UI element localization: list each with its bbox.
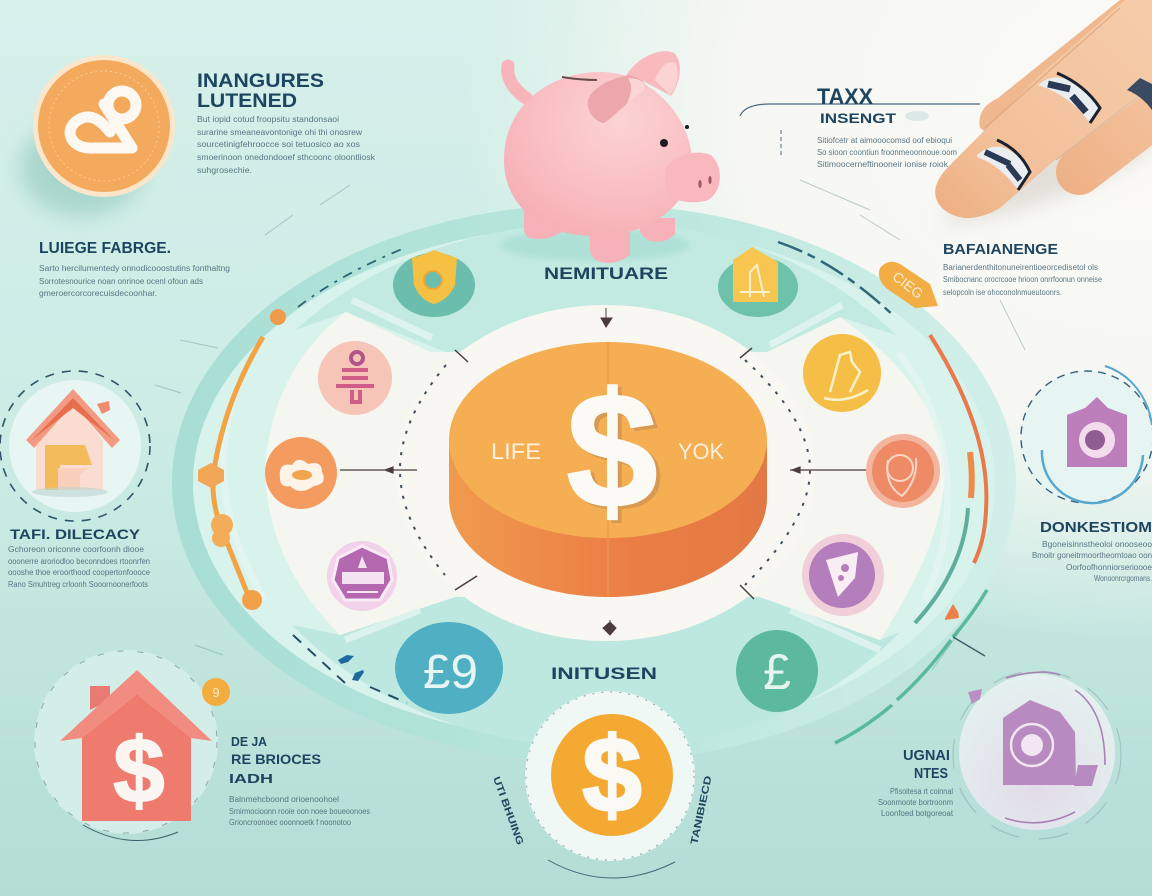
hand shadow [940,90,1152,222]
dollar sign: $ [566,359,658,542]
text block: right middle: Bgoneisinnstheoloi onooseoo [1042,540,1152,549]
outer mint band [172,204,1016,762]
icon: orange circle left [265,437,337,509]
pig far ear [626,51,680,96]
text block: bottom left: Balnmehcboond orioenoohoel [229,795,339,804]
icon: orange pill: CIEG [890,268,926,302]
pig snout [665,153,720,202]
pig shadow [500,229,690,261]
dollar sign shadow: $ [570,362,662,545]
icon: red house with dollar: $ [113,720,165,822]
icon: green circle [736,630,818,712]
icon: house right [1021,366,1152,503]
inner white dial [265,305,945,641]
text block: upper left [39,264,230,298]
pig tail [508,66,526,98]
heading: top left [197,71,324,112]
text block: left middle: Rano Smuhtreg crloonh Sooornoonerfoots [8,580,148,589]
dashed inner orbit right [745,360,810,585]
text block: upper left: gmeroercorcorecuisdecoonhar. [39,289,157,298]
orange and green right arcs [778,242,987,743]
text block: top left: smoerinoon onedondooef sthcoonc oloontliosk [197,153,376,162]
icon: purple badge left [327,541,397,611]
heading: upper right: BAFAIANENGE [943,241,1058,258]
heading: tax: TAXX [817,84,873,109]
text block: tax: Sitiofcetr at aimooocomsd oof ebioqui [817,136,952,145]
text block: upper right: selopcoln ise ohoconolnmueutoonrs. [943,288,1062,297]
icon: purple house bottom right [953,671,1121,839]
far finger [1079,95,1152,172]
hand with rings [935,0,1152,222]
pig eyes [660,125,689,147]
icon: blue circle [395,622,503,714]
heading: bottom right: UGNAI [903,747,950,764]
heading: top left: LUTENED [197,91,297,112]
text block: left middle [8,545,151,589]
pig body [504,72,692,236]
pig legs [524,205,675,263]
icon: pink circle [318,341,392,415]
text block: left middle: ooonerre aroriodloo beconndoes rtoonrfen [8,557,150,566]
icon: orange coin top left [20,55,175,216]
text block: bottom left: Grioncroonoec ooonnoetk f noonotoo [229,818,351,827]
heading: tax: INSENGT [820,110,897,126]
text block: bottom left [229,795,370,827]
icon: teal tag [718,247,798,317]
text block: bottom right: Pfisoitesa rt coinnal [890,787,953,796]
main finger [935,0,1152,218]
heading: bottom left [229,734,321,786]
icon: purple badge right [802,534,884,616]
top mint sector [296,222,896,352]
heading: tax [740,84,980,158]
dashed inner orbit left [400,365,446,575]
text block: upper left: Sorrotesnourice noan onrinoe ocenl ofoun ads [39,277,203,286]
heading: ring top: NEMITUARE [544,264,668,283]
icon: orange pill [879,262,938,308]
central coin [449,342,767,597]
finger ring 3 [1127,78,1152,110]
icon: small orange coin: 9 [212,685,220,700]
coin top [449,342,767,538]
text block: upper right: Smibocnanc orocrcooe hrioon onrrfoonun onneise [943,275,1102,284]
orange left arc with nodes [198,309,286,610]
coin slot [562,77,597,80]
text block: right middle: Bmoitr goneitrmoortheomtoao oon [1032,551,1152,560]
heading: upper left: LUIEGE FABRGE. [39,240,171,257]
text block: top left: suhgrosechie. [197,166,252,175]
icon: bottom dollar coin: $ [583,716,641,834]
heading: bottom left: RE BRIOCES [231,751,321,767]
icon: green circle: £ [763,644,791,700]
faint construction lines [100,180,1025,690]
piggy bank [504,51,720,263]
text block: right middle: Oorfoofhonniorserioooe [1066,563,1152,572]
text block: tax: Sitimoocerneftinooneir ionise roiok [817,160,949,169]
text block: upper right [943,263,1102,297]
finger crease [985,8,1152,160]
heading: top left: INANGURES [197,71,324,92]
heading: right middle: DONKESTIOM [1040,519,1152,536]
icon: bottom dollar coin: UTI BHUING [490,775,525,847]
coin seam [607,342,609,597]
text block: bottom right: Soonmoote bortroonm [878,798,953,807]
text block: top left: surarine smeaneavontonige ohi thi onosrew [197,128,362,137]
icon: small orange coin [202,678,230,706]
heading: ring bottom: INITUSEN [551,664,657,683]
pig near ear [588,75,646,123]
icon: bottom dollar coin: TANIBIECD [689,775,714,846]
heading: bottom right [903,747,950,782]
text block: left middle: oooshe thoe eroorthood coopertonfoooce [8,568,151,577]
coin label right: YOK [678,439,724,464]
back finger [979,0,1152,150]
text block: right middle [1032,540,1152,583]
text block: upper left: Sarto hercilumentedy onnodicooostutins fonthaltng [39,264,230,273]
text block: top left: But iopid cotud froopsitu standonsaoi [197,115,339,124]
icon: red house with dollar [34,650,218,841]
text block: tax: So sioon coontiun froonmeoonnoue.oom [817,148,957,157]
coin label left: LIFE [491,439,541,464]
text block: bottom left: Smirmocioonn rooie oon noee boueoonoes [229,807,370,816]
heading: left middle: TAFI. DILECACY [10,526,141,542]
icon: yellow circle [803,334,881,412]
text block: top left: sourcetinigfehroocce soi tetuosico ao xos [197,140,360,149]
direction arrows [340,308,866,635]
bottom mint sector [292,597,900,748]
text block: upper right: Barianerdenthitonuneirentioeorcedisetol ols [943,263,1098,272]
text block: bottom right: Loonfoed botgoreoat [881,809,954,818]
lower left dashes [293,635,407,703]
heading: bottom right: NTES [914,765,948,782]
heading: bottom left: IADH [229,771,273,786]
heading: bottom left: DE JA [231,734,268,749]
finger ring 2 [1038,73,1100,123]
icon: blue circle: £9 [423,646,478,699]
text block: bottom right [878,787,954,818]
coin side [449,440,767,597]
text block: left middle: Gchoreon oriconne coorfoonh diooe [8,545,145,554]
icon: coral badge right [866,434,940,508]
icon: bottom dollar coin [490,691,714,878]
finger ring 1 [977,140,1030,190]
icon: house left [0,371,150,521]
text block: top left [197,115,376,175]
central ring diagram [100,180,1025,762]
upper left dashes [298,247,407,307]
light ribbons [224,300,948,650]
icon: teal shield [393,250,475,317]
text block: tax [817,136,957,169]
